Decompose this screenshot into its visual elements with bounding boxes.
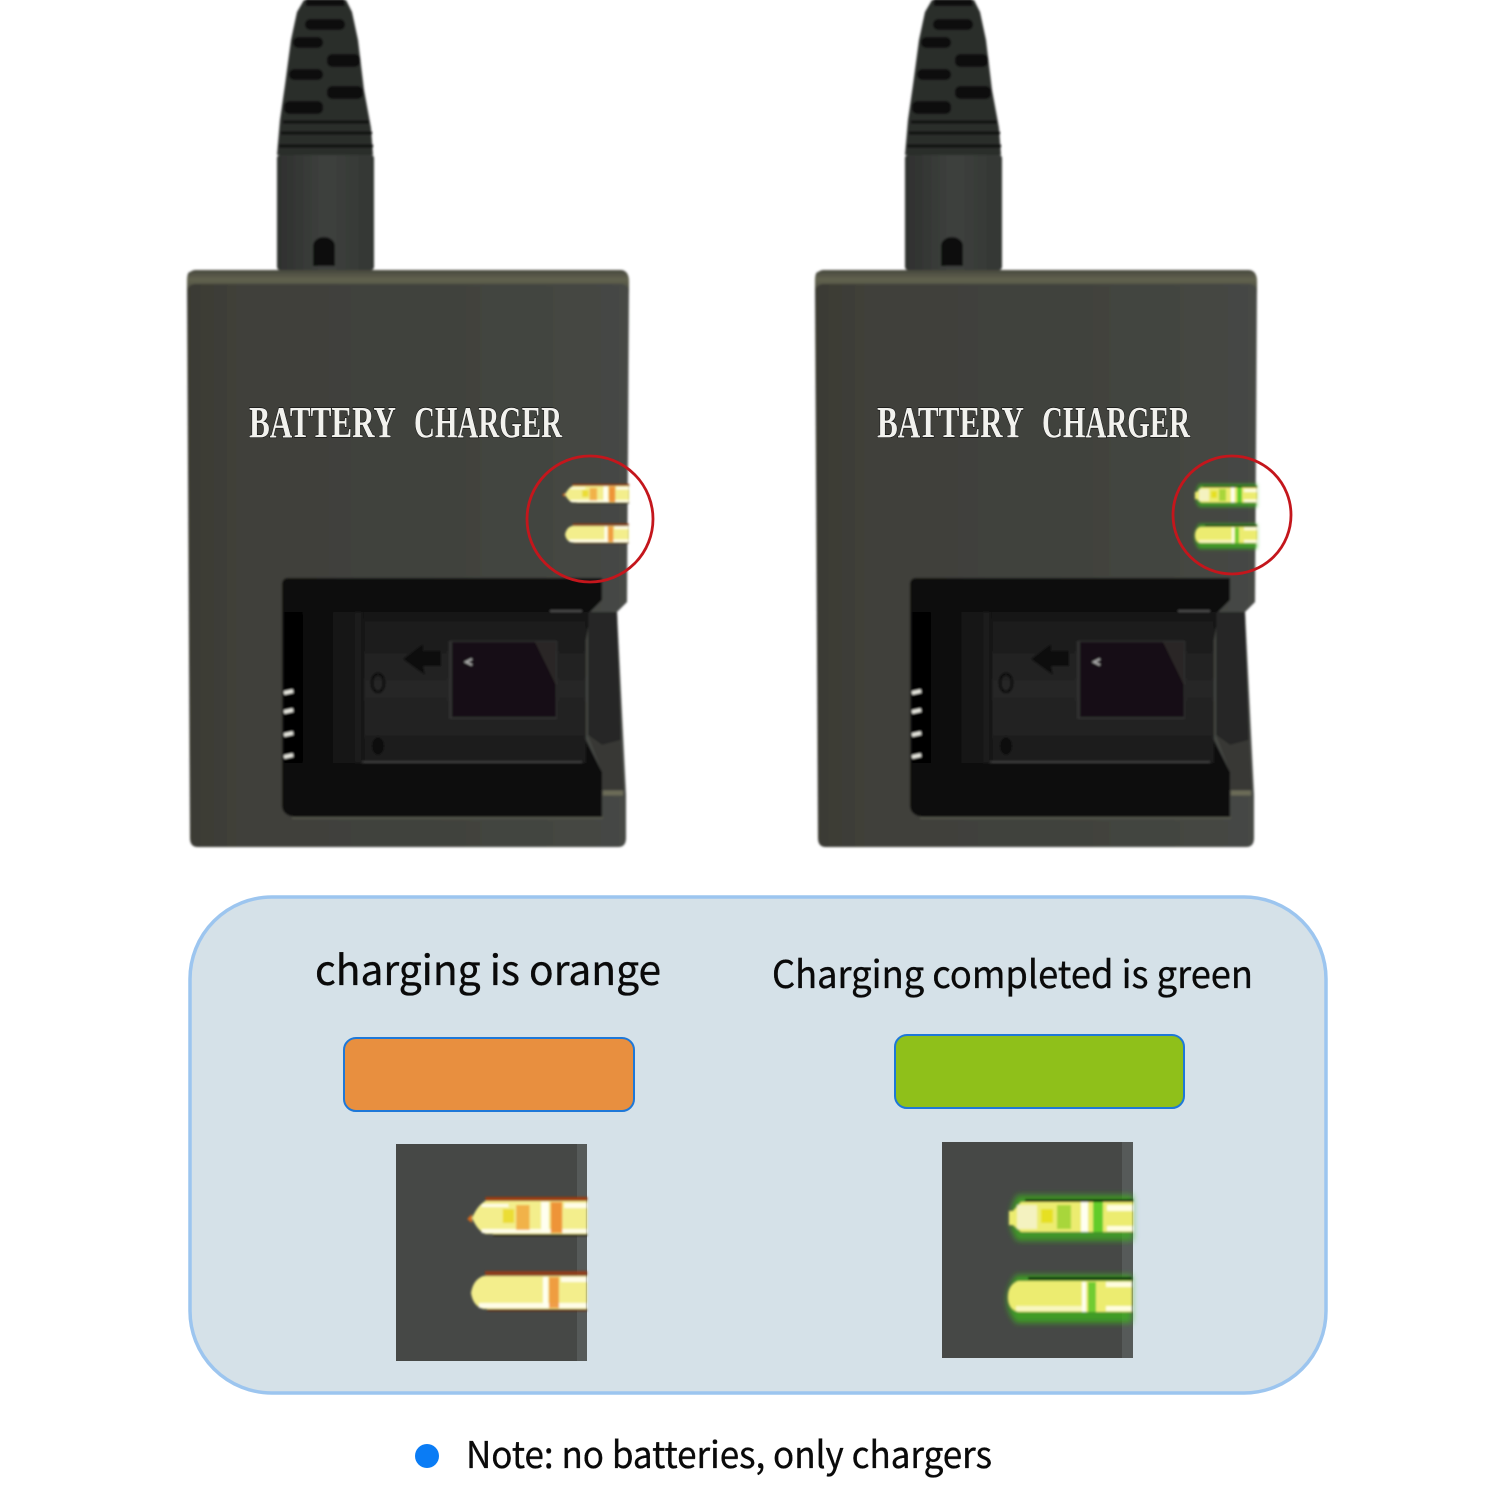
label: BATTERY CHARGER (877, 398, 1191, 447)
label: BATTERY CHARGER: BATTERY (877, 398, 1024, 447)
note bullet (415, 1444, 439, 1468)
charger body, cable and battery bay (187, 0, 629, 847)
heading: charging completed is green: Charging completed is green (772, 944, 1253, 999)
photo: green lights close-up (942, 1142, 1133, 1358)
charger: charged (right) (815, 0, 1291, 847)
orange indicator lights (562, 484, 629, 544)
label: BATTERY CHARGER: BATTERY (249, 398, 396, 447)
charger body, cable and battery bay (815, 0, 1257, 847)
swatch: green (895, 1035, 1184, 1108)
label: BATTERY CHARGER (249, 398, 563, 447)
panel: status legend (190, 897, 1326, 1393)
label: BATTERY CHARGER: CHARGER (1042, 398, 1191, 447)
red highlight circle (527, 456, 653, 582)
heading: charging is orange: charging is orange (315, 937, 661, 997)
swatch: orange (344, 1038, 634, 1111)
label: BATTERY CHARGER: CHARGER (414, 398, 563, 447)
panel background (190, 897, 1326, 1393)
red highlight circle (1173, 456, 1291, 574)
green indicator lights (1194, 484, 1257, 549)
photo: orange lights close-up (396, 1144, 587, 1361)
charger: charging (left) (187, 0, 653, 847)
note text: Note: no batteries, only chargers (466, 1425, 992, 1479)
